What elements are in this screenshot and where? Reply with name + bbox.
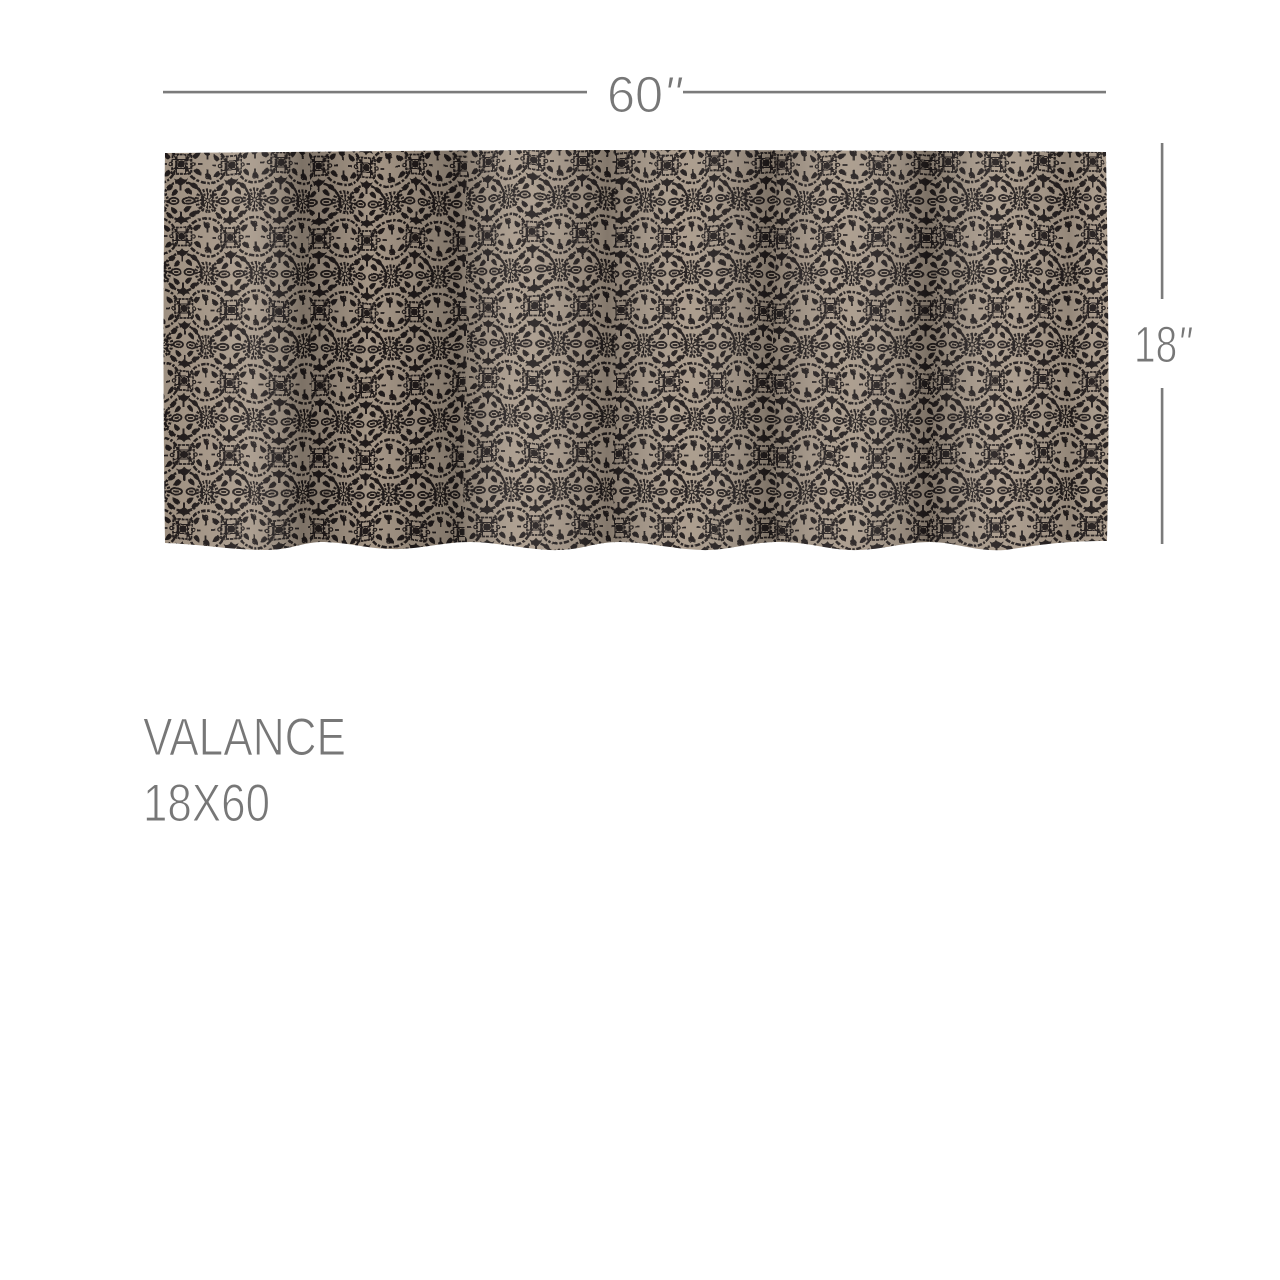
fabric valance panel [150,135,1125,565]
valance size infographic [144,76,1192,821]
height dimension: 18 inches: 18" [1134,316,1192,373]
product label [143,708,346,833]
product label: VALANCE [143,708,346,767]
width dimension: 60 inches: 60" [607,66,683,123]
product label: 18X60 [143,774,270,833]
